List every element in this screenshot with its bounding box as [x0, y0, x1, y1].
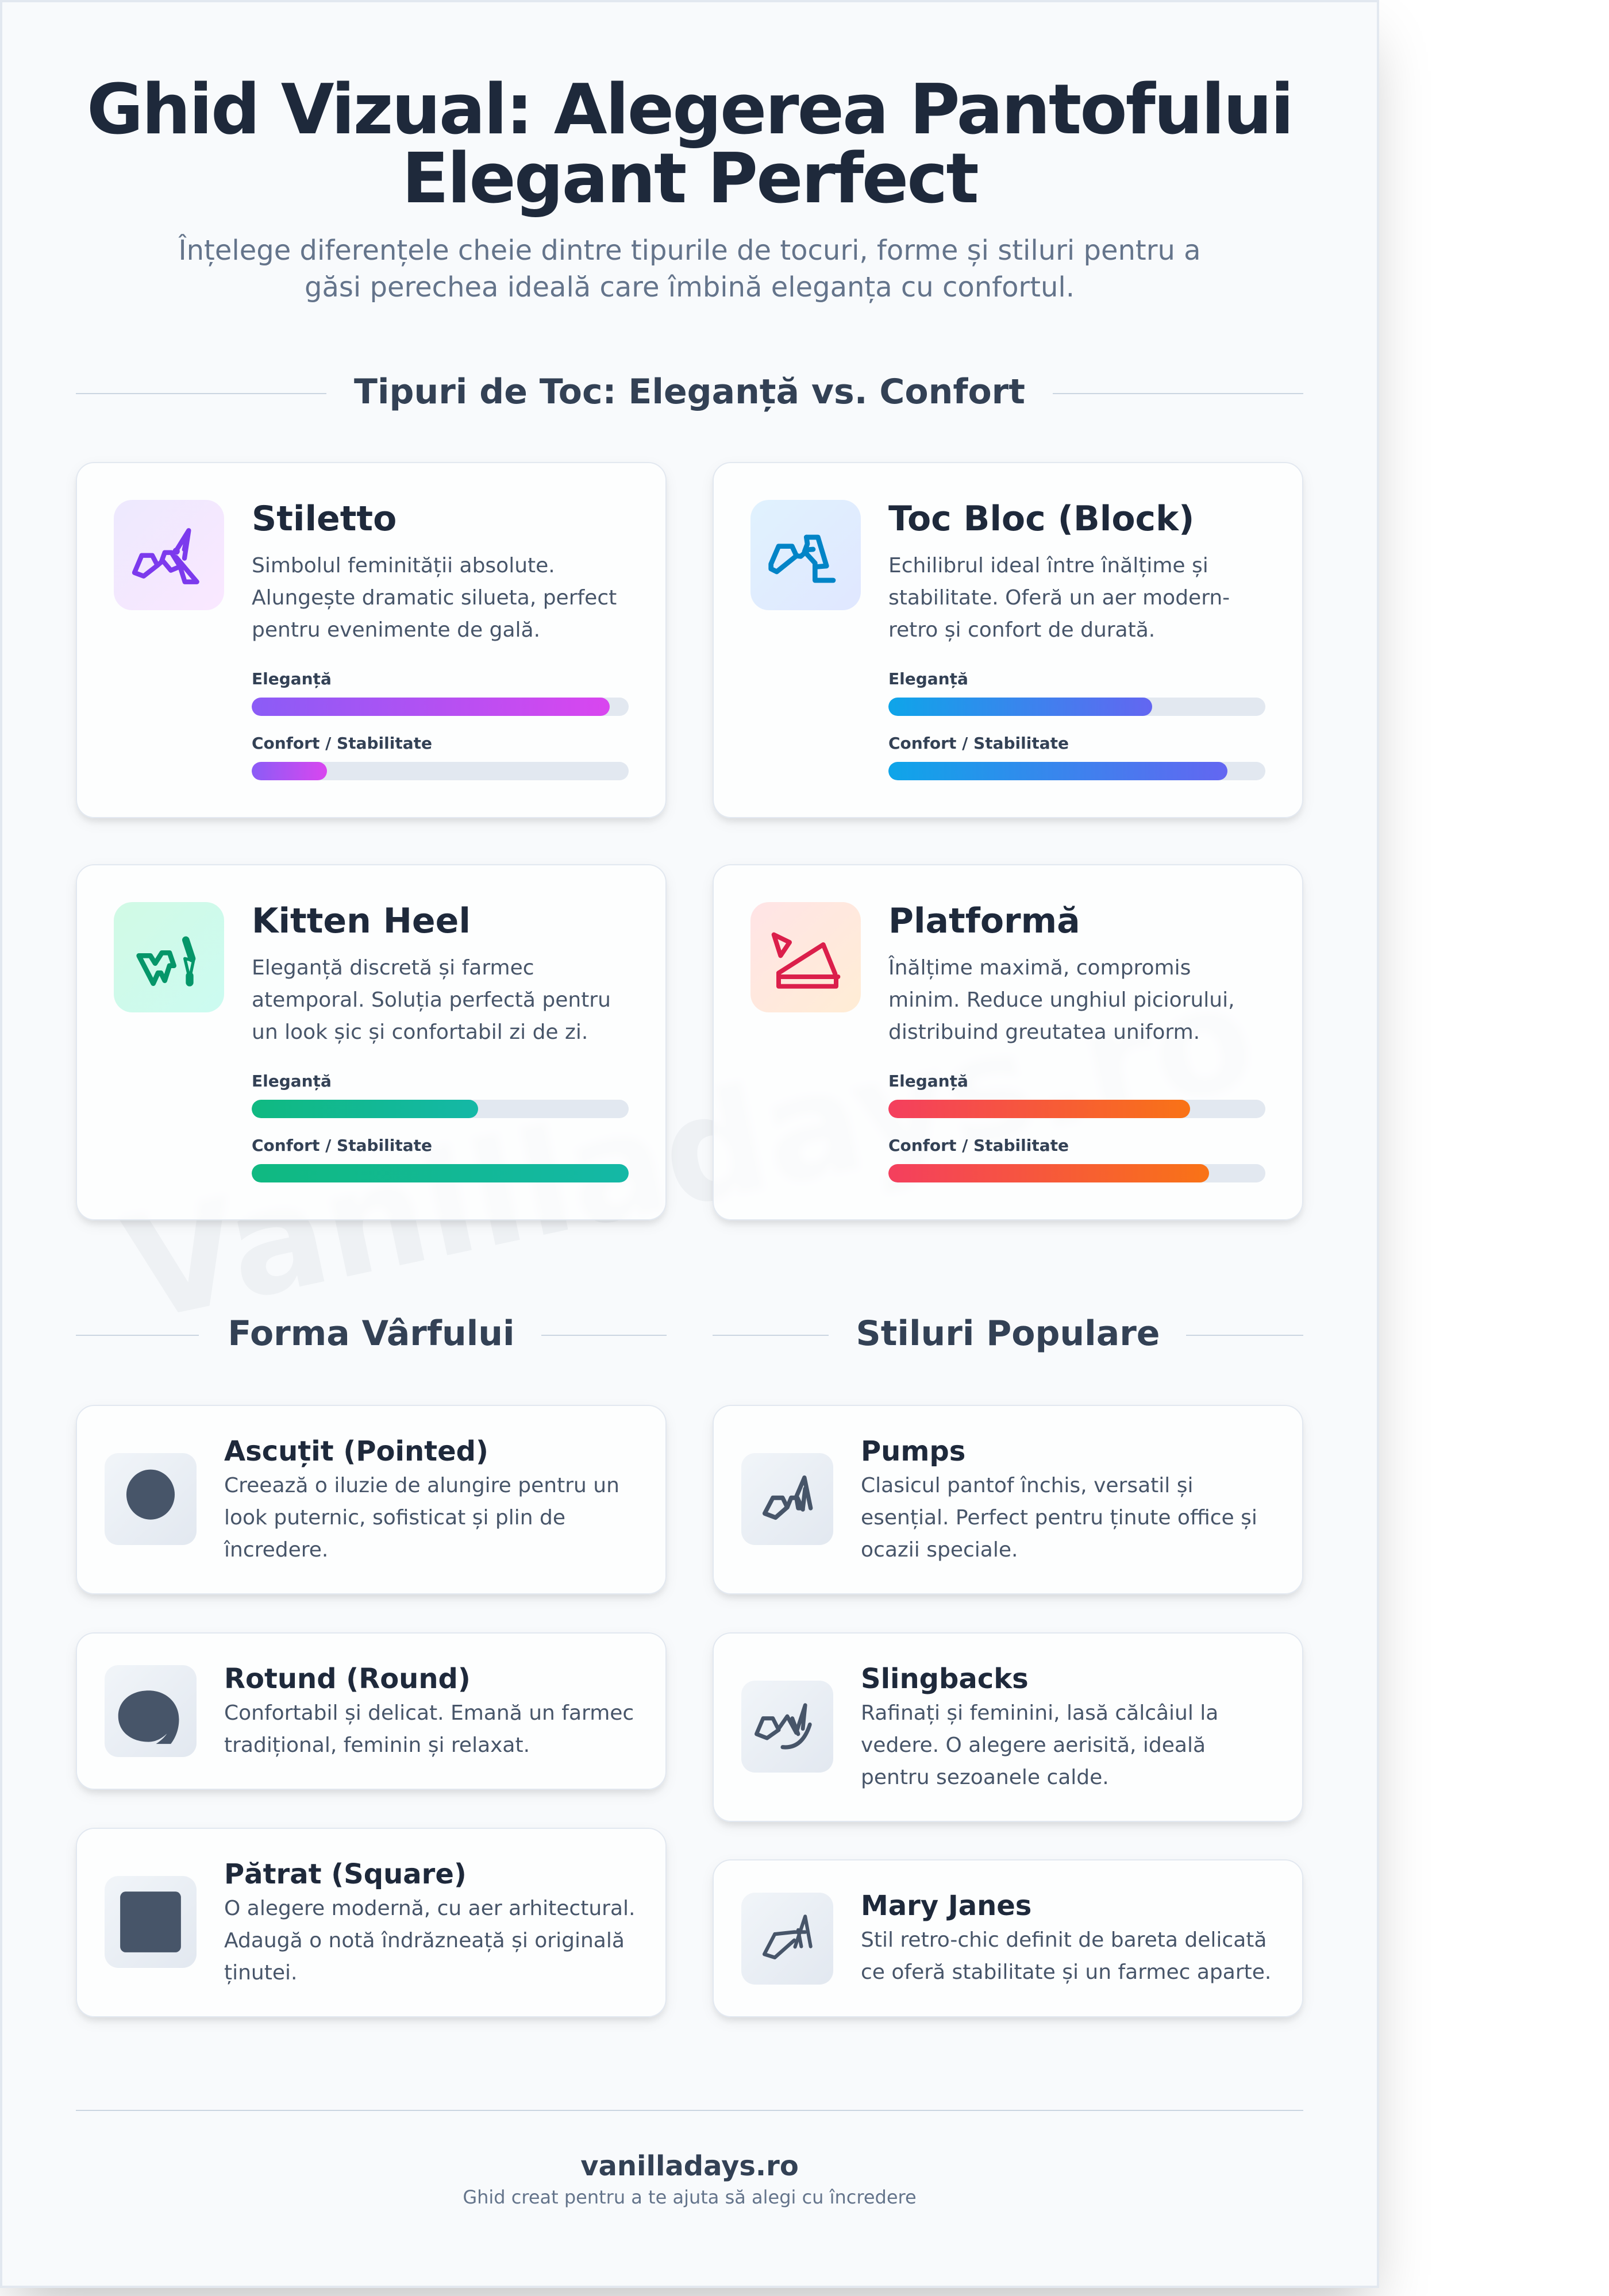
description [224, 1897, 635, 1985]
description [252, 956, 611, 1044]
description: Eleganță discretă și farmec [252, 956, 534, 980]
heading: Slingbacks: Slingbacks [861, 1663, 1029, 1695]
heading: Pumps: Pumps [861, 1435, 965, 1467]
icon: round toe [105, 1665, 197, 1757]
icon: kitten heel shoe [114, 902, 224, 1012]
label: elegance: Eleganță [888, 1072, 968, 1091]
description [888, 955, 1235, 1044]
heading: Kitten Heel: Kitten Heel [252, 901, 471, 941]
icon: slingback [741, 1681, 833, 1773]
description [861, 1474, 1257, 1562]
footer: brand: vanilladays.ro [580, 2150, 799, 2182]
title [87, 70, 1292, 219]
icon: platform shoe [750, 902, 861, 1012]
description: Echilibrul ideal între înălțime și [888, 554, 1208, 577]
description: încredere. [224, 1538, 328, 1562]
panel: Mary Janes [713, 1859, 1303, 2017]
description [861, 1928, 1271, 1984]
description [252, 554, 617, 642]
panel: Rotund [76, 1632, 667, 1790]
bar: comfort 100% [252, 1164, 629, 1182]
label: comfort: Confort / Stabilitate [888, 734, 1069, 753]
label: elegance: Eleganță [252, 1072, 332, 1091]
label: elegance: Eleganță [888, 669, 968, 688]
label: comfort: Confort / Stabilitate [888, 1136, 1069, 1155]
section heading: popular styles: Stiluri Populare [856, 1313, 1160, 1354]
description: look puternic, sofisticat și plin de [224, 1506, 565, 1530]
panel: Toc Bloc [713, 462, 1303, 818]
subtitle [178, 234, 1201, 303]
watermark: Vanilladays.ro: Vanilladays.ro [111, 952, 1267, 1354]
description: minim. Reduce unghiul piciorului, [888, 988, 1235, 1012]
footer: tagline: Ghid creat pentru a te ajuta să alegi cu încredere [463, 2186, 917, 2208]
label: comfort: Confort / Stabilitate [252, 734, 432, 753]
title: Ghid Vizual: Alegerea Pantofului [87, 70, 1292, 150]
section heading: heel types: Tipuri de Toc: Eleganță vs. Confort [354, 372, 1025, 412]
description: Simbolul feminității absolute. [252, 554, 555, 577]
description: Alungește dramatic silueta, perfect [252, 586, 617, 610]
heading: Rotund: Rotund (Round) [224, 1663, 471, 1695]
label: comfort: Confort / Stabilitate [252, 1136, 432, 1155]
bar: elegance 60% [252, 1100, 629, 1118]
description: ținutei. [224, 1961, 297, 1985]
description: Înălțime maximă, compromis [888, 956, 1191, 980]
bar: comfort 90% [888, 762, 1265, 780]
description: tradițional, feminin și relaxat. [224, 1733, 530, 1757]
description: pentru sezoanele calde. [861, 1766, 1109, 1789]
title: Elegant Perfect [402, 139, 977, 219]
description: retro și confort de durată. [888, 618, 1155, 642]
panel: Pătrat [76, 1828, 667, 2017]
heading: Platformă: Platformă [888, 901, 1080, 941]
description: Clasicul pantof închis, versatil și [861, 1474, 1193, 1497]
icon: pumps [741, 1453, 833, 1545]
label: elegance: Eleganță [252, 669, 332, 688]
icon: pointed toe [105, 1453, 197, 1545]
icon: square toe [105, 1876, 197, 1968]
bar: elegance 70% [888, 698, 1265, 716]
description [888, 554, 1230, 642]
description: Confortabil și delicat. Emană un farmec [224, 1701, 634, 1725]
bar: comfort 85% [888, 1164, 1265, 1182]
description [224, 1701, 634, 1757]
panel: Stiletto [76, 462, 667, 818]
bar: elegance 95% [252, 698, 629, 716]
description: distribuind greutatea uniform. [888, 1020, 1200, 1044]
panel: Platformă [713, 864, 1303, 1220]
icon: stiletto shoe [114, 500, 224, 610]
heading: Stiletto: Stiletto [252, 499, 397, 539]
description: atemporal. Soluția perfectă pentru [252, 988, 611, 1012]
heading: Pătrat: Pătrat (Square) [224, 1858, 467, 1890]
heading: Mary Janes: Mary Janes [861, 1890, 1031, 1922]
description: esențial. Perfect pentru ținute office și [861, 1506, 1257, 1530]
description: ce oferă stabilitate și un farmec aparte. [861, 1960, 1271, 1984]
subtitle: Înțelege diferențele cheie dintre tipurile de tocuri, forme și stiluri pentru a [178, 234, 1201, 267]
description: pentru evenimente de gală. [252, 618, 540, 642]
heading: Ascuțit: Ascuțit (Pointed) [224, 1435, 488, 1467]
panel: Kitten Heel [76, 864, 667, 1220]
description: ocazii speciale. [861, 1538, 1018, 1562]
description: stabilitate. Oferă un aer modern- [888, 586, 1230, 610]
panel: Slingbacks [713, 1632, 1303, 1822]
heading: Toc Bloc: Toc Bloc (Block) [888, 499, 1194, 539]
description: O alegere modernă, cu aer arhitectural. [224, 1897, 635, 1920]
section heading: toe shape: Forma Vârfului [228, 1313, 515, 1354]
bar: comfort 20% [252, 762, 629, 780]
description [224, 1474, 619, 1562]
description: vedere. O alegere aerisită, ideală [861, 1733, 1206, 1757]
description: Creează o iluzie de alungire pentru un [224, 1474, 619, 1497]
subtitle: găsi perechea ideală care îmbină eleganța cu confortul. [305, 271, 1075, 303]
description: un look șic și confortabil zi de zi. [252, 1020, 588, 1044]
panel: Pumps [713, 1405, 1303, 1594]
bar: elegance 80% [888, 1100, 1265, 1118]
icon: mary janes [741, 1893, 833, 1985]
description: Stil retro-chic definit de bareta delicată [861, 1928, 1267, 1952]
description [861, 1701, 1218, 1789]
icon: block heel shoe [750, 500, 861, 610]
description: Adaugă o notă îndrăzneață și originală [224, 1929, 625, 1952]
description: Rafinați și feminini, lasă călcâiul la [861, 1701, 1218, 1725]
panel: Ascuțit [76, 1405, 667, 1594]
